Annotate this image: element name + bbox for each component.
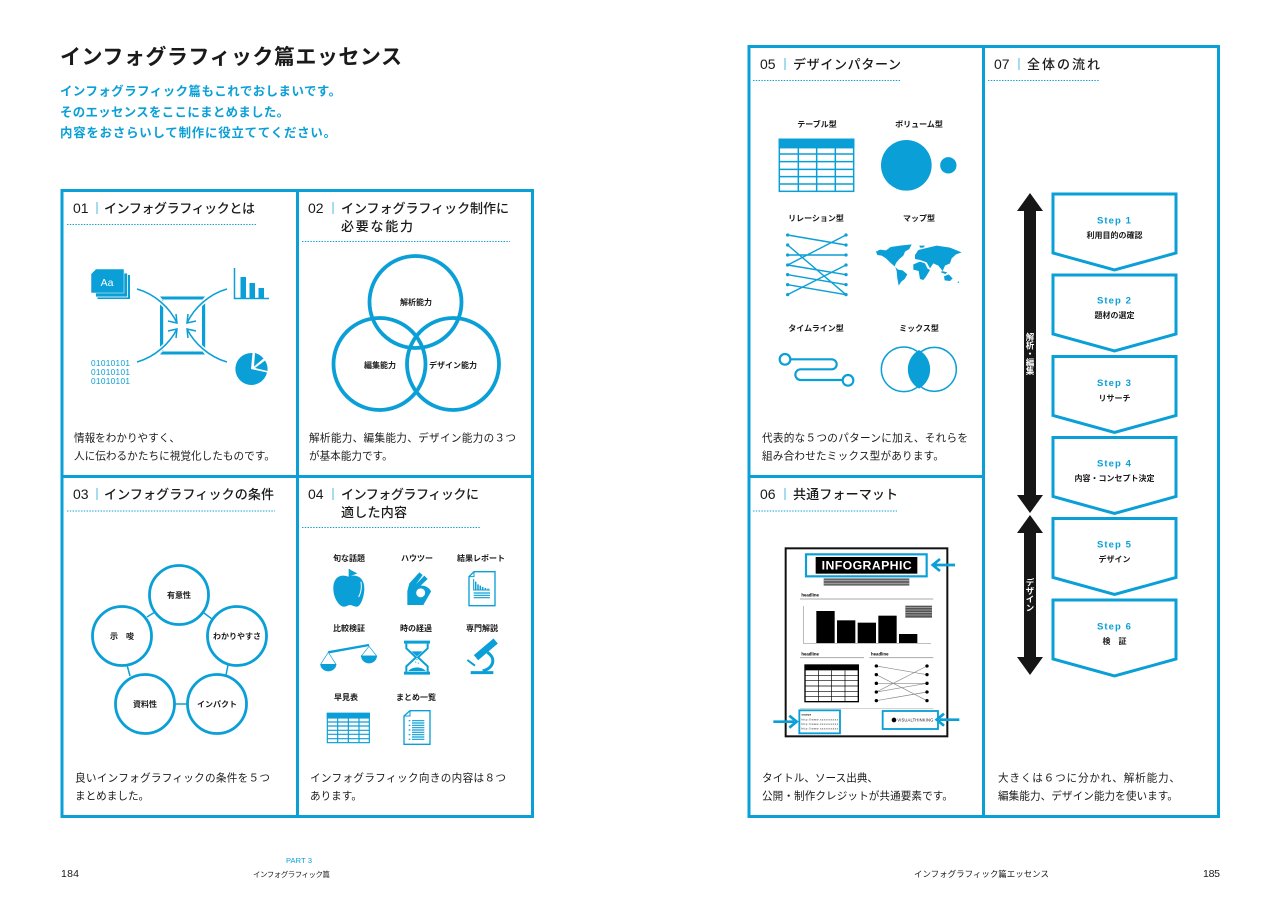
format diagram	[773, 548, 959, 736]
title: インフォグラフィック篇エッセンス	[60, 45, 402, 69]
panel: 07 overall flow	[988, 56, 1180, 802]
body text 02	[309, 432, 516, 462]
source box: source	[801, 712, 811, 716]
icon: binary data: 01010101	[91, 367, 130, 377]
step 4: Step 4	[1097, 458, 1132, 470]
icon: hourglass	[404, 641, 430, 675]
body text 06: タイトル、ソース出典、	[762, 772, 878, 784]
icon: binary data: 01010101	[91, 376, 130, 386]
heading 04	[302, 486, 480, 528]
icon: relation pattern	[786, 233, 848, 296]
body text 05: 代表的な５つのパターンに加え、それらを	[762, 432, 968, 444]
body text 03: 良いインフォグラフィックの条件を５つ	[75, 772, 270, 784]
icon: documents	[91, 269, 130, 299]
heading 05	[753, 56, 901, 80]
arrows converging	[137, 289, 227, 362]
five circles diagram: 資料性	[133, 699, 157, 709]
panel: 06 common format	[753, 486, 959, 802]
step 5: デザイン	[1098, 554, 1130, 564]
step 4	[1053, 438, 1176, 514]
body text 07: 大きくは６つに分かれ、解析能力、	[998, 772, 1180, 784]
right page frame	[749, 46, 1218, 816]
step 6: Step 6	[1097, 622, 1132, 632]
icon labels: ハウツー	[401, 554, 433, 563]
five circles diagram: インパクト	[197, 699, 237, 709]
panel: 02 required skills	[302, 200, 516, 462]
step 3: リサーチ	[1098, 394, 1130, 403]
lead text: 内容をおさらいして制作に役立ててください。	[60, 125, 336, 140]
step 6	[1053, 600, 1176, 676]
icon: world map	[876, 244, 962, 286]
source box: http://www.xxxxxxxxxx	[801, 722, 839, 726]
step 6: 検 証	[1102, 636, 1126, 646]
heading 02: インフォグラフィック制作に	[341, 201, 509, 216]
icon grid	[320, 553, 505, 744]
icon labels: 早見表	[334, 692, 358, 702]
icon: report	[469, 572, 495, 606]
icon: volume pattern	[881, 140, 956, 191]
infographic frame	[160, 296, 205, 354]
step 1: 利用目的の確認	[1086, 230, 1142, 240]
body text 05	[762, 432, 968, 462]
heading 02: 02	[308, 200, 324, 216]
heading 06: 06	[760, 486, 776, 502]
heading 03	[67, 486, 275, 511]
title block: INFOGRAPHIC	[822, 559, 912, 573]
arrow: analysis and editing: 解析・編集	[1025, 332, 1035, 376]
heading 04: 適した内容	[341, 505, 407, 520]
body text 04: インフォグラフィック向きの内容は８つ	[310, 772, 506, 784]
body text 07: 編集能力、デザイン能力を使います。	[998, 790, 1178, 802]
icon: pie chart	[235, 353, 268, 385]
pattern labels: リレーション型	[788, 213, 844, 223]
panel: 03 conditions	[67, 486, 275, 802]
icon: hand	[407, 572, 431, 605]
heading 02: 必要な能力	[341, 219, 413, 234]
title block	[806, 554, 927, 586]
heading 04: インフォグラフィックに	[341, 487, 479, 502]
icon: documents: Aa	[101, 277, 114, 289]
step 1: Step 1	[1097, 216, 1132, 226]
five circles diagram	[92, 566, 266, 734]
heading 03: インフォグラフィックの条件	[104, 487, 274, 502]
step 3: Step 3	[1097, 378, 1132, 389]
venn diagram	[334, 256, 499, 410]
heading 07: 全体の流れ	[1027, 57, 1100, 72]
arrows	[773, 559, 959, 728]
lead text	[60, 84, 341, 140]
bar chart section	[800, 592, 933, 643]
source box: http://www.xxxxxxxxxx	[801, 718, 839, 722]
pattern labels: タイムライン型	[788, 323, 844, 333]
icon labels: 時の経過	[400, 623, 432, 633]
icon labels: 結果レポート	[457, 553, 505, 563]
relation section	[800, 651, 933, 708]
icon: binary data	[91, 358, 130, 386]
pattern labels: ボリューム型	[895, 119, 943, 129]
icon: timeline pattern	[780, 354, 853, 386]
bar chart section: headline	[801, 592, 819, 597]
heading 07	[988, 56, 1100, 80]
body text 03: まとめました。	[75, 790, 149, 802]
footer left: 184	[61, 868, 79, 880]
pattern labels: ミックス型	[899, 323, 939, 333]
page outline	[786, 548, 947, 736]
icon labels: 旬な話題	[333, 553, 365, 563]
panel: 01 what is an infographic	[67, 200, 275, 462]
icon: document list	[404, 711, 430, 744]
credit box: VISUALTHINKING	[897, 718, 933, 723]
icon: apple	[333, 569, 364, 607]
body text 04	[310, 772, 506, 802]
footer right: インフォグラフィック篇エッセンス	[914, 869, 1049, 879]
relation section: headline	[871, 651, 889, 656]
venn diagram: デザイン能力	[429, 360, 477, 370]
step 4: 内容・コンセプト決定	[1074, 473, 1154, 483]
body text 02: が基本能力です。	[309, 450, 393, 462]
panel: 05 design patterns	[753, 56, 968, 462]
step 2: Step 2	[1097, 296, 1132, 306]
heading 01: インフォグラフィックとは	[104, 201, 255, 216]
footer left: PART 3	[286, 856, 312, 865]
table section	[800, 651, 864, 702]
icon: microscope	[467, 641, 496, 673]
lead text: インフォグラフィック篇もこれでおしまいです。	[60, 84, 341, 98]
five circles diagram: わかりやすさ	[213, 631, 261, 641]
left page frame	[62, 190, 532, 816]
lead text: そのエッセンスをここにまとめました。	[60, 106, 289, 120]
panel: 04 suitable content	[302, 486, 506, 802]
pattern labels: テーブル型	[797, 119, 837, 129]
heading 07: 07	[994, 56, 1010, 72]
diagram: sources converge on infographic	[91, 268, 269, 386]
five circles diagram: 有意性	[167, 590, 191, 600]
five circles diagram: 示 唆	[110, 631, 134, 641]
heading 03: 03	[73, 486, 89, 502]
heading 02	[302, 200, 510, 242]
icon labels	[333, 553, 505, 702]
credit box	[883, 711, 938, 729]
step 2: 題材の選定	[1094, 310, 1134, 320]
heading 01	[67, 200, 256, 224]
step 3	[1053, 356, 1176, 432]
arrow: design: デザイン	[1025, 577, 1035, 612]
heading 05: デザインパターン	[793, 57, 901, 72]
icon labels: 比較検証	[333, 623, 365, 633]
venn diagram: 編集能力	[364, 360, 396, 370]
heading 01: 01	[73, 200, 89, 216]
icon: mix pattern	[881, 347, 956, 392]
pattern labels	[788, 119, 943, 333]
footer right	[914, 868, 1220, 880]
heading 04: 04	[308, 486, 324, 502]
body text 06	[762, 772, 953, 802]
icon: scale	[320, 645, 377, 671]
body text 01: 人に伝わるかたちに視覚化したものです。	[74, 450, 275, 462]
icon: table	[327, 713, 369, 743]
step 5: Step 5	[1097, 540, 1132, 550]
icon labels: 専門解説	[466, 623, 498, 633]
body text 06: 公開・制作クレジットが共通要素です。	[762, 790, 953, 802]
table section: headline	[801, 651, 819, 656]
arrow: design	[1017, 515, 1043, 675]
icon: binary data: 01010101	[91, 358, 130, 368]
icon: bar chart	[234, 268, 269, 298]
footer right: 185	[1203, 868, 1220, 880]
icon labels: まとめ一覧	[396, 692, 436, 702]
body text 03	[75, 772, 270, 802]
body text 02: 解析能力、編集能力、デザイン能力の３つ	[309, 432, 516, 444]
venn diagram: 解析能力	[400, 297, 432, 307]
pattern labels: マップ型	[903, 213, 935, 223]
body text 07	[998, 772, 1180, 802]
step 5	[1053, 518, 1176, 594]
footer left: インフォグラフィック篇	[253, 869, 330, 879]
body text 01	[74, 432, 275, 462]
heading 05: 05	[760, 56, 776, 72]
body text 04: あります。	[310, 790, 362, 802]
step 2	[1053, 275, 1176, 351]
body text 05: 組み合わせたミックス型があります。	[762, 450, 944, 462]
arrow: analysis and editing	[1017, 193, 1043, 513]
icon: table pattern	[779, 139, 854, 191]
step 1	[1053, 194, 1176, 270]
source box: http://www.xxxxxxxxxx	[801, 726, 839, 730]
heading 06	[753, 486, 898, 511]
source box	[799, 710, 840, 733]
footer left	[61, 856, 330, 880]
heading 06: 共通フォーマット	[793, 487, 898, 502]
body text 01: 情報をわかりやすく、	[74, 432, 180, 444]
